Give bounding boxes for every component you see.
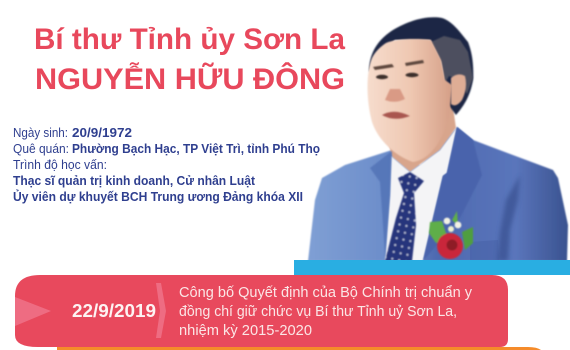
sleeve crease	[497, 175, 520, 261]
biography text block: Ủy viên dự khuyết BCH Trung ương Đảng khóa XII	[13, 189, 303, 204]
title: Bí thư Tỉnh ủy Sơn La	[34, 23, 346, 56]
title	[34, 23, 346, 96]
announcement text: đồng chí giữ chức vụ Bí thư Tỉnh uỷ Sơn La,	[179, 303, 457, 320]
boutonniere flower	[429, 211, 473, 259]
biography text block: Ngày sinh:	[13, 126, 68, 140]
biography text block: 20/9/1972	[72, 126, 132, 140]
face	[368, 39, 452, 162]
portrait illustration	[308, 17, 568, 261]
title: NGUYỄN HỮU ĐÔNG	[35, 62, 345, 96]
announcement text	[179, 284, 472, 339]
ear	[451, 74, 466, 105]
biography text block: Phường Bạch Hạc, TP Việt Trì, tỉnh Phú Thọ	[72, 142, 320, 156]
chevron divider	[156, 283, 166, 338]
announcement text: Công bố Quyết định của Bộ Chính trị chuẩn y	[179, 284, 472, 301]
biography text block: Trình độ học vấn:	[13, 158, 107, 172]
triangle marker	[15, 297, 51, 326]
eyebrows, eyes, nose and mouth	[373, 60, 424, 119]
biography text block: Thạc sĩ quản trị kinh doanh, Cử nhân Luật	[13, 174, 256, 188]
orange panel edge	[57, 347, 541, 350]
biography text block	[13, 126, 320, 204]
shirt collar	[385, 127, 457, 261]
blue band	[294, 260, 570, 275]
necktie	[385, 172, 424, 261]
pocket	[470, 240, 499, 261]
left lapel	[370, 151, 392, 261]
announcement text: nhiệm kỳ 2015-2020	[179, 322, 312, 339]
date: 22/9/2019	[72, 300, 156, 321]
hair	[369, 17, 473, 115]
neck	[388, 100, 456, 172]
suit jacket	[308, 127, 568, 261]
grey side hair	[431, 36, 473, 94]
panel background	[15, 275, 508, 347]
biography text block: Quê quán:	[13, 142, 69, 156]
right lapel	[423, 127, 482, 261]
date panel	[15, 275, 508, 347]
